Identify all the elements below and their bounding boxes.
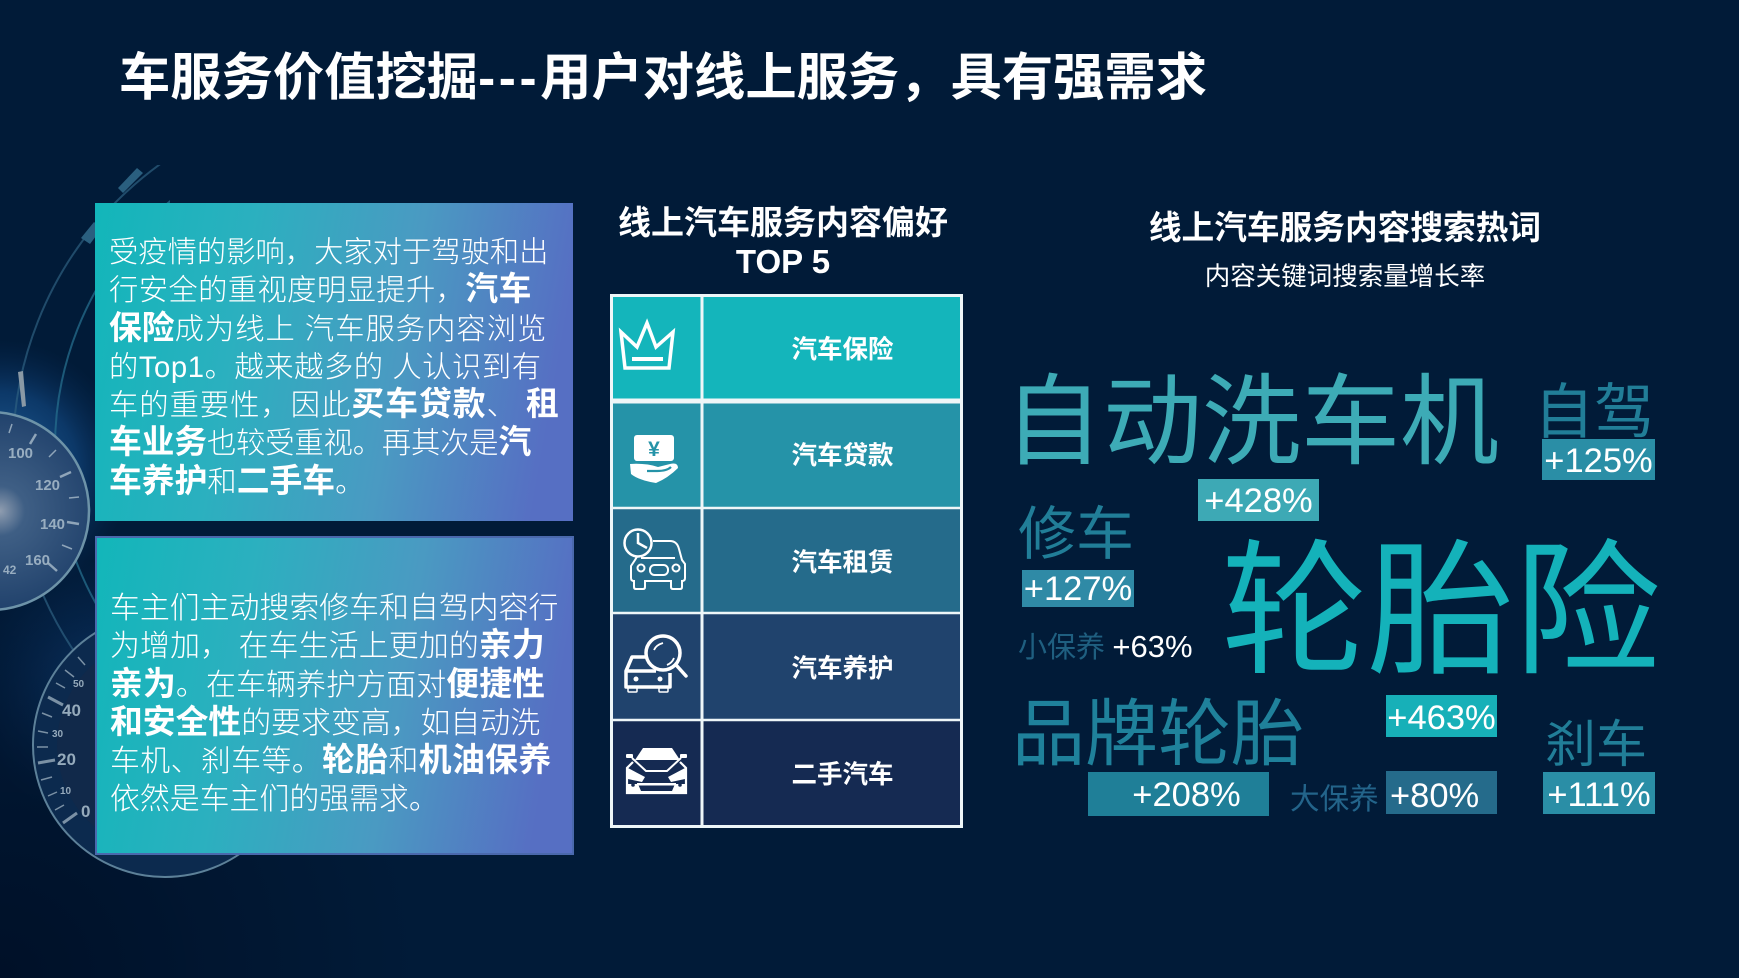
row 1: car insurance: [610, 294, 963, 400]
tag: +208%: +208%: [1132, 776, 1241, 814]
tag: +428%: +428%: [1204, 482, 1313, 520]
text block: search summary: 和安全性的要求变高，如自动洗: [110, 703, 540, 740]
icon: crown: [618, 318, 676, 370]
text block: insurance summary: 车养护和二手车。: [109, 462, 364, 499]
background: speedometer gauges: 30: [52, 729, 64, 740]
text block: insurance summary: 保险成为线上 汽车服务内容浏览: [109, 309, 547, 346]
panel: text box 1: [95, 203, 573, 521]
keyword: small maintenance: 小保养: [1018, 632, 1105, 664]
tag: +111%: +111%: [1547, 776, 1651, 814]
background: speedometer gauges: 10: [60, 786, 72, 797]
label: 汽车租赁: [791, 549, 894, 577]
icon: hand with money: [630, 435, 678, 483]
heading: top 5: TOP 5: [736, 243, 830, 280]
text block: insurance summary: 受疫情的影响，大家对于驾驶和出: [109, 236, 548, 269]
tag: +127%: +127%: [1024, 570, 1132, 608]
icon: hand with money: ¥: [648, 438, 660, 461]
keyword: brand tire: 品牌轮胎: [1012, 694, 1304, 775]
background: speedometer gauges: 100: [8, 445, 33, 462]
text block: search summary: 车主们主动搜索修车和自驾内容行: [110, 592, 558, 625]
text block: insurance summary: 行安全的重视度明显提升，汽车: [109, 270, 532, 307]
background: speedometer gauges: 50: [73, 679, 85, 690]
background: speedometer gauges: 40: [62, 701, 81, 720]
background: speedometer gauges: 42: [3, 563, 17, 577]
icon: car with clock: [623, 528, 686, 590]
row 5: used car: [610, 720, 963, 828]
tag: +208%: [1088, 772, 1269, 816]
label: 汽车养护: [791, 655, 894, 683]
text block: search summary: [110, 592, 558, 816]
title: 车服务价值挖掘---用户对线上服务，具有强需求: [119, 49, 1207, 106]
background: speedometer gauges: 20: [57, 750, 76, 769]
heading: top 5: [618, 204, 948, 280]
heading: search terms: 线上汽车服务内容搜索热词: [1149, 209, 1541, 246]
text block: search summary: 亲为。在车辆养护方面对便捷性: [110, 665, 545, 702]
text block: search summary: 车机、刹车等。轮胎和机油保养: [110, 741, 552, 778]
keyword: automatic car wash: 自动洗车机: [1004, 366, 1499, 477]
tag: +80%: +80%: [1390, 777, 1479, 815]
background: speedometer gauges: 140: [40, 516, 65, 533]
keyword: car repair: 修车: [1018, 502, 1134, 567]
icon: car with magnifier: [624, 634, 688, 693]
text block: insurance summary: 车的重要性，因此买车贷款、 租: [109, 385, 560, 422]
background: speedometer gauges: 0: [81, 802, 90, 821]
keyword: big maintenance: 大保养: [1290, 783, 1379, 816]
keyword: brakes: 刹车: [1545, 716, 1647, 773]
tag: +63%: +63%: [1112, 629, 1193, 664]
tag: +463%: +463%: [1387, 699, 1496, 737]
keyword: tire insurance: 轮胎险: [1221, 530, 1661, 694]
tag: +80%: [1386, 771, 1497, 814]
row 4: car maintenance: [610, 613, 963, 720]
row 3: car rental: [610, 508, 963, 613]
label: 汽车保险: [791, 336, 894, 364]
keyword: self-drive: 自驾: [1534, 379, 1654, 446]
text block: search summary: 依然是车主们的强需求。: [110, 783, 439, 816]
text block: insurance summary: 的Top1。越来越多的 人认识到有: [109, 351, 542, 384]
text block: search summary: 为增加， 在车生活上更加的亲力: [110, 626, 545, 663]
row 2: car loan: [610, 400, 963, 508]
heading: top 5: 线上汽车服务内容偏好: [618, 204, 948, 241]
background: speedometer gauges: 120: [35, 477, 60, 494]
text block: insurance summary: 车业务也较受重视。再其次是汽: [109, 423, 531, 460]
text block: insurance summary: [109, 236, 560, 499]
tag: +125%: +125%: [1544, 442, 1653, 480]
table grid lines: [610, 294, 963, 828]
subheading: 内容关键词搜索量增长率: [1205, 263, 1485, 291]
icon: car front: [626, 748, 688, 794]
label: 二手汽车: [791, 761, 894, 789]
word cloud: [1004, 366, 1661, 816]
background: speedometer gauges: [0, 165, 240, 978]
label: 汽车贷款: [791, 442, 894, 470]
panel: text box 2: [95, 536, 574, 855]
table: top 5 content: [610, 294, 963, 828]
background: speedometer gauges: 160: [25, 552, 50, 569]
